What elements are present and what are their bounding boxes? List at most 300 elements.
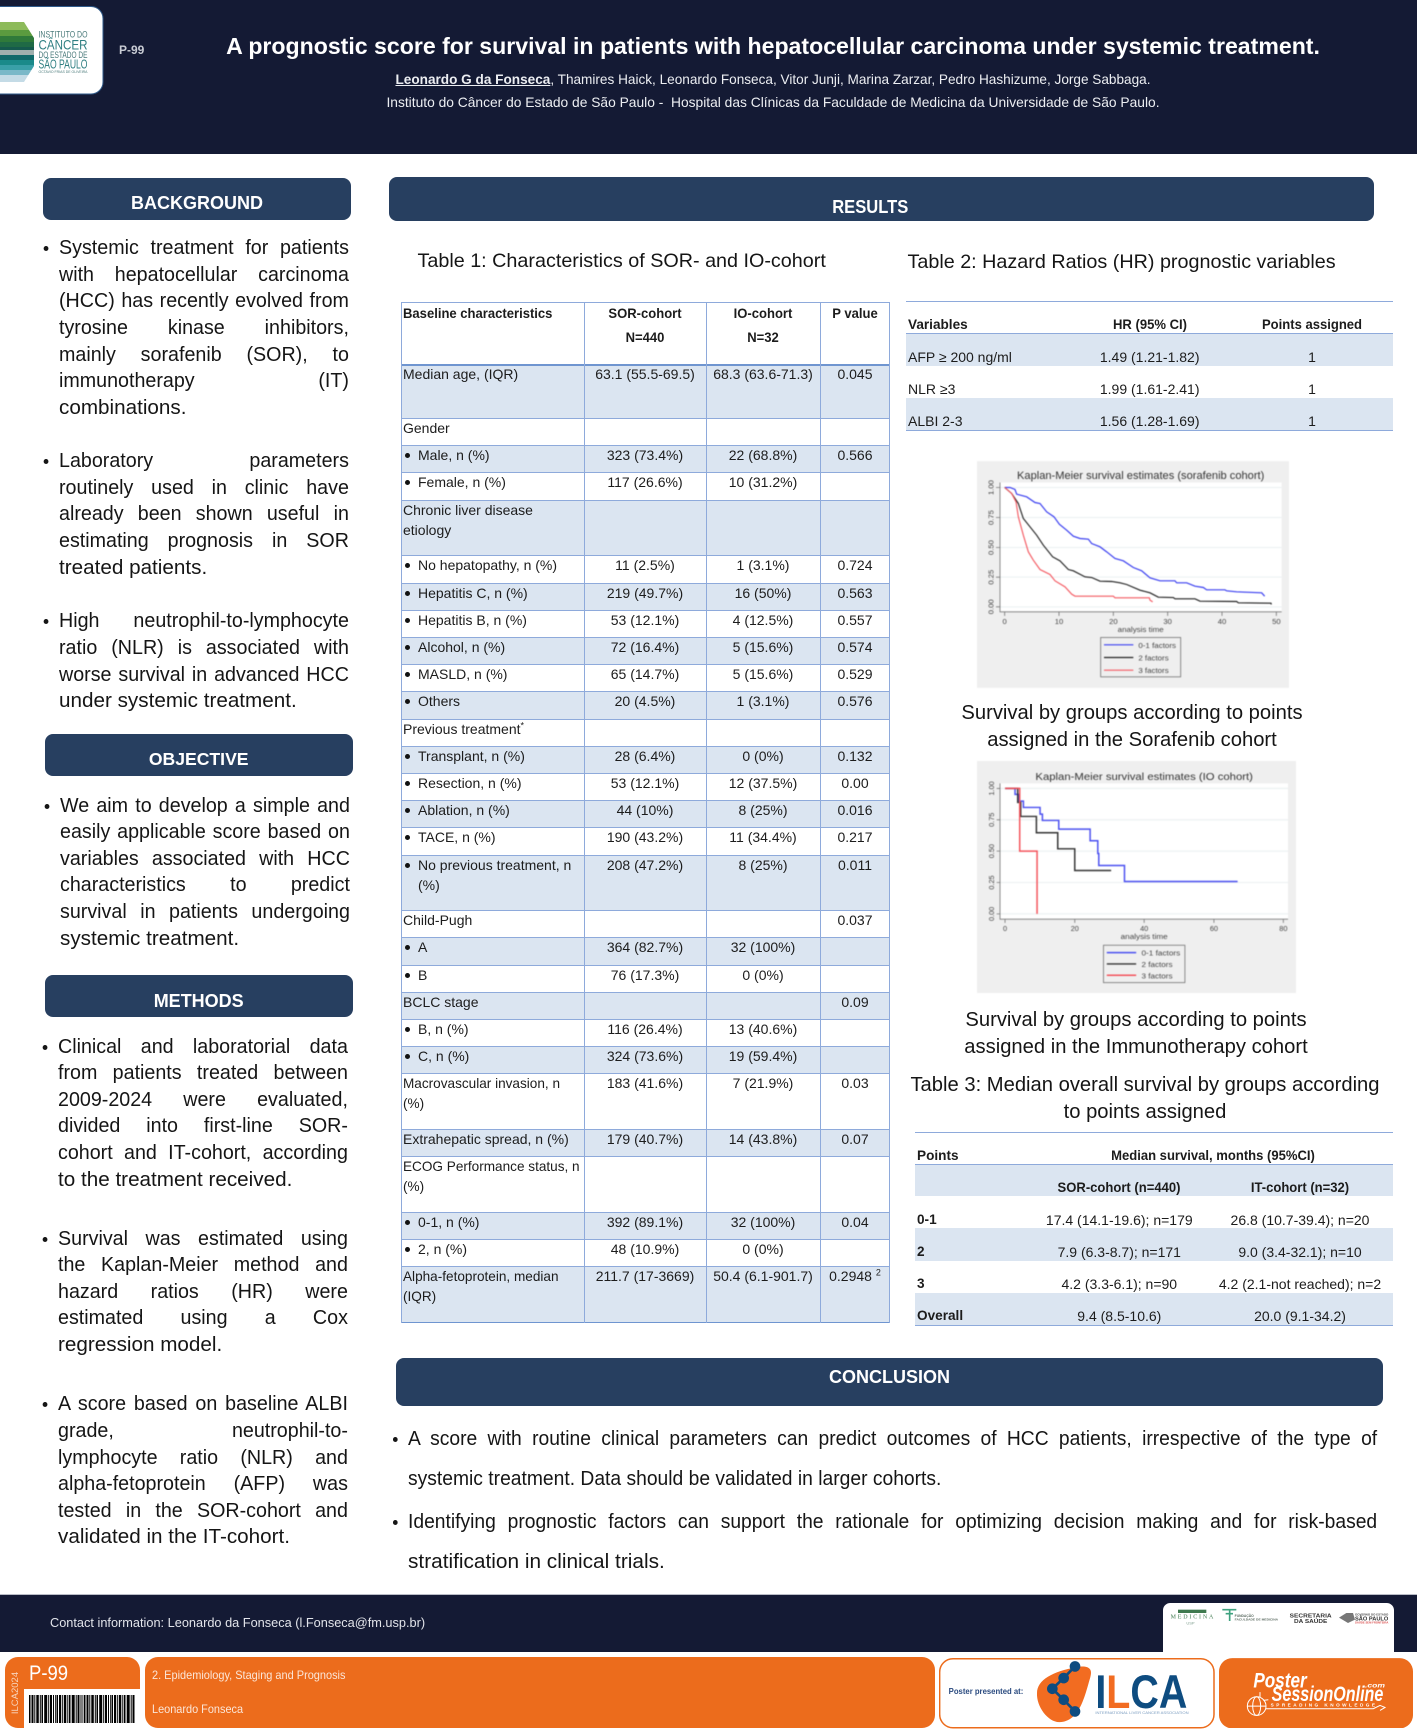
row: 3 points: 3 <box>917 1276 925 1290</box>
presenter: Leonardo Fonseca <box>152 1702 243 1716</box>
row: 2 points: 2 <box>917 1244 925 1258</box>
row: macrovascular invasion: (%) <box>403 1095 424 1111</box>
logo: PosterSessionOnline: SPREADING KNOWLEDGE <box>1271 1702 1375 1707</box>
row: child-pugh <box>401 910 890 937</box>
text: objective bullet: variables associated with HCC <box>60 847 350 870</box>
text: methods bullet 3: alpha-fetoprotein (AFP) was <box>58 1472 348 1495</box>
text: background bullet 1: immunotherapy (IT) <box>59 369 349 392</box>
row: BCLC stage: BCLC stage <box>403 994 478 1010</box>
row: hepatitis C <box>401 583 890 610</box>
caption: sorafenib survival: Survival by groups according to points <box>961 702 1303 724</box>
text: objective bullet: We aim to develop a simple and <box>60 794 350 817</box>
logo: PosterSessionOnline: .com <box>1365 1683 1386 1689</box>
table 3 title: to points assigned <box>1064 1101 1226 1123</box>
text: background bullet 3: High neutrophil-to-lymphocyte <box>59 609 349 632</box>
text: methods bullet 1: divided into first-line SOR- <box>58 1114 348 1137</box>
text: methods bullet 1: cohort and IT-cohort, according <box>58 1141 348 1164</box>
row: ECOG 2: 0 (0%) <box>742 1241 784 1257</box>
row: 0-1 points <box>917 1212 1369 1228</box>
row: MASLD: 65 (14.7%) <box>611 666 679 682</box>
table 1 header row: Baseline characteristics <box>403 306 552 321</box>
partner logos: SAÚDE SEM FRONTEIRA <box>1355 1620 1388 1625</box>
row: ALBI: ALBI 2-3 <box>908 413 962 429</box>
table 1 header row: IO-cohort <box>734 306 792 321</box>
text: objective bullet <box>60 793 350 952</box>
table 1 title: Table 1: Characteristics of SOR- and IO-cohort <box>418 250 826 272</box>
table 2 header <box>908 317 1362 332</box>
text: methods bullet 2 <box>58 1226 348 1359</box>
row: ablation: 8 (25%) <box>738 802 788 818</box>
chart: Kaplan-Meier sorafenib cohort: 30 <box>1163 617 1172 626</box>
table 3 header <box>917 1148 1315 1163</box>
partner logos <box>1163 1603 1394 1652</box>
category and presenter strip <box>145 1657 935 1728</box>
logo: ILCA poster presented at <box>939 1658 1215 1728</box>
text: methods bullet 3: tested in the SOR-cohort and <box>58 1499 348 1522</box>
row: alcohol: 5 (15.6%) <box>733 639 793 655</box>
heading: methods: METHODS <box>154 991 244 1011</box>
logo: ILCA poster presented at: ILCA <box>1095 1666 1187 1719</box>
row: male: 0.566 <box>837 447 873 463</box>
text: methods bullet 1: Clinical and laboratorial data <box>58 1035 348 1058</box>
row: no previous treatment: No previous treatment, n <box>418 857 571 873</box>
row: ECOG 2: 48 (10.9%) <box>611 1241 679 1257</box>
row: ECOG 0-1: 0-1, n (%) <box>418 1214 479 1230</box>
table 3 title: Table 3: Median overall survival by groups according <box>910 1074 1380 1096</box>
row: resection: 12 (37.5%) <box>729 775 797 791</box>
row: hepatitis B: 4 (12.5%) <box>733 612 793 628</box>
row: hepatitis C: 16 (50%) <box>735 585 791 601</box>
row: NLR: 1.99 (1.61-2.41) <box>1100 381 1200 397</box>
row: MASLD: MASLD, n (%) <box>418 666 507 682</box>
chart: Kaplan-Meier IO cohort: 80 <box>1279 924 1287 933</box>
table 2: hazard ratios <box>906 301 1393 431</box>
chart: Kaplan-Meier sorafenib cohort: 40 <box>1218 617 1226 626</box>
text: background bullet 1: with hepatocellular carcinoma <box>59 263 349 286</box>
row: NLR: NLR ≥3 <box>908 381 955 397</box>
chart: Kaplan-Meier IO cohort: 20 <box>1071 924 1079 933</box>
row: hepatitis B: Hepatitis B, n (%) <box>418 612 527 628</box>
row: ECOG performance status: (%) <box>403 1178 424 1194</box>
table 3: median overall survival <box>915 1132 1393 1326</box>
text: background bullet 2: estimating prognosis in SOR <box>59 529 349 552</box>
row: ECOG 2: 2, n (%) <box>418 1241 467 1257</box>
table 3 header: Median survival, months (95%CI) <box>1111 1148 1315 1162</box>
row: alpha-fetoprotein: Alpha-fetoprotein, median <box>403 1268 559 1284</box>
row: 0-1 points: 0-1 <box>917 1212 937 1226</box>
row: alpha-fetoprotein: 0.2948 2 <box>829 1267 881 1284</box>
text: background bullet 1: tyrosine kinase inhibitors, <box>59 316 349 339</box>
poster code: P-99 <box>119 43 144 57</box>
row: AFP: 1.49 (1.21-1.82) <box>1100 349 1200 365</box>
chart: Kaplan-Meier IO cohort <box>977 761 1296 993</box>
row: 2 points: 7.9 (6.3-8.7); n=171 <box>1058 1244 1181 1260</box>
table 3 header: Points <box>917 1148 959 1162</box>
row: others: 1 (3.1%) <box>737 693 789 709</box>
table 1: baseline characteristics <box>401 302 890 1323</box>
chart: Kaplan-Meier sorafenib cohort: 1.00 <box>986 480 995 495</box>
row: female: 117 (26.6%) <box>607 474 683 490</box>
row: transplant: 0.132 <box>837 748 873 764</box>
row: ablation: Ablation, n (%) <box>418 802 510 818</box>
row: AFP <box>908 349 1316 365</box>
row: BCLC B: 116 (26.4%) <box>607 1021 683 1037</box>
row: transplant: 28 (6.4%) <box>615 748 675 764</box>
row: alcohol: Alcohol, n (%) <box>418 639 505 655</box>
row: others: 0.576 <box>837 693 873 709</box>
chart: Kaplan-Meier sorafenib cohort: 0.75 <box>986 510 995 525</box>
logo: PosterSessionOnline <box>1219 1658 1413 1728</box>
row: AFP: 1 <box>1308 349 1316 365</box>
row: macrovascular invasion: 183 (41.6%) <box>607 1075 683 1091</box>
row: child-pugh B: 0 (0%) <box>742 967 784 983</box>
row: female: Female, n (%) <box>418 474 506 490</box>
heading: background <box>43 178 351 220</box>
row: ECOG performance status: ECOG Performance status, n <box>403 1158 580 1174</box>
row: alpha-fetoprotein: (IQR) <box>403 1288 436 1304</box>
row: others <box>401 691 890 719</box>
row: ablation: 0.016 <box>837 802 873 818</box>
chart: Kaplan-Meier IO cohort: 2 factors <box>1142 960 1173 969</box>
text: methods bullet 2: estimated using a Cox <box>58 1306 348 1329</box>
authors: Leonardo G da Fonseca, Thamires Haick, Leonardo Fonseca, Vitor Junji, Marina Zarzar, Pedro Hashizume, Jorge Sabbaga. <box>395 72 1151 87</box>
row: BCLC C: 19 (59.4%) <box>729 1048 797 1064</box>
row: no hepatopathy: 1 (3.1%) <box>737 557 789 573</box>
chart: Kaplan-Meier sorafenib cohort: Kaplan-Meier survival estimates (sorafenib cohort) <box>1017 470 1264 482</box>
row: no previous treatment: 0.011 <box>838 857 872 873</box>
text: background bullet 1 <box>59 235 349 421</box>
text: methods bullet 3: A score based on baseline ALBI <box>58 1392 348 1415</box>
row: child-pugh B: 76 (17.3%) <box>611 967 679 983</box>
row: ECOG 0-1 <box>401 1212 890 1239</box>
row: child-pugh: 0.037 <box>837 912 873 928</box>
row: no hepatopathy: 0.724 <box>837 557 873 573</box>
heading: objective: OBJECTIVE <box>149 749 249 769</box>
row: TACE: 11 (34.4%) <box>729 829 797 845</box>
table 1 header row: N=440 <box>626 330 664 345</box>
text: background bullet 2: treated patients. <box>59 556 207 579</box>
row: no previous treatment <box>401 855 890 910</box>
chart: Kaplan-Meier sorafenib cohort: analysis time <box>1118 625 1164 634</box>
row: overall: 9.4 (8.5-10.6) <box>1077 1308 1161 1324</box>
caption: sorafenib survival <box>961 702 1303 751</box>
affiliation: Instituto do Câncer do Estado de São Paulo - Hospital das Clínicas da Faculdade de Medicina da Universidade de São Paulo. <box>386 95 1160 110</box>
row: alpha-fetoprotein: 211.7 (17-3669) <box>596 1268 694 1284</box>
row: others: 20 (4.5%) <box>615 693 675 709</box>
text: background bullet 2 <box>59 448 349 581</box>
row: median age: 63.1 (55.5-69.5) <box>595 366 695 382</box>
row: MASLD: 5 (15.6%) <box>733 666 793 682</box>
chart: Kaplan-Meier sorafenib cohort: 2 factors <box>1138 654 1169 662</box>
row: ablation <box>401 800 890 827</box>
row: overall: 20.0 (9.1-34.2) <box>1254 1308 1346 1324</box>
table 1 header row: P value <box>832 306 878 321</box>
chart: Kaplan-Meier IO cohort: analysis time <box>1121 932 1168 941</box>
row: 3 points: 4.2 (3.3-6.1); n=90 <box>1062 1276 1177 1292</box>
chart: Kaplan-Meier sorafenib cohort: 3 factors <box>1138 666 1169 675</box>
row: ECOG performance status <box>401 1156 890 1212</box>
row: resection: Resection, n (%) <box>418 775 521 791</box>
partner logos: MEDICINA <box>1171 1615 1214 1621</box>
row: hepatitis B <box>401 610 890 637</box>
partner logos: GOVERNO DO ESTADO <box>1355 1613 1388 1617</box>
row: median age: Median age, (IQR) <box>403 366 518 382</box>
text: methods bullet 1: 2009-2024 were evaluated, <box>58 1088 348 1111</box>
chart: Kaplan-Meier IO cohort: 1.00 <box>987 781 996 796</box>
text: background bullet 2: Laboratory parameters <box>59 449 349 472</box>
row: chronic liver disease etiology: etiology <box>403 522 451 538</box>
row: NLR <box>908 381 1316 397</box>
row: female: 10 (31.2%) <box>729 474 797 490</box>
vertical conference label: ILCA2024 <box>10 1672 20 1714</box>
row: hepatitis B: 53 (12.1%) <box>611 612 679 628</box>
chart: Kaplan-Meier IO cohort: 0.00 <box>987 907 996 921</box>
caption: sorafenib survival: assigned in the Sorafenib cohort <box>987 729 1277 751</box>
text: methods bullet 1: from patients treated between <box>58 1061 348 1084</box>
text: conclusion bullet 2: Identifying prognostic factors can support the rationale for optimizing decision making and for risk-based <box>408 1510 1377 1533</box>
chart: Kaplan-Meier sorafenib cohort <box>977 461 1289 688</box>
row: resection: 0.00 <box>841 775 869 791</box>
row: macrovascular invasion: 7 (21.9%) <box>733 1075 793 1091</box>
row: macrovascular invasion: 0.03 <box>841 1075 869 1091</box>
chart: Kaplan-Meier sorafenib cohort: 0.25 <box>986 570 995 585</box>
chart: Kaplan-Meier sorafenib cohort: 0-1 factors <box>1138 641 1176 650</box>
row: median age <box>401 364 890 418</box>
row: child-pugh: Child-Pugh <box>403 912 472 928</box>
heading: conclusion <box>396 1358 1383 1406</box>
row: macrovascular invasion: Macrovascular invasion, n <box>403 1075 560 1091</box>
row: hepatitis C: Hepatitis C, n (%) <box>418 585 528 601</box>
text: objective bullet: systemic treatment. <box>60 927 239 950</box>
logo: Instituto do Cancer: OCTAVIO FRIAS DE OLIVEIRA <box>38 70 88 74</box>
header banner <box>0 0 1417 154</box>
row: ECOG 0-1: 392 (89.1%) <box>607 1214 683 1230</box>
row: BCLC C: 324 (73.6%) <box>607 1048 683 1064</box>
partner logos: USP <box>1186 1621 1195 1626</box>
text: methods bullet 2: regression model. <box>58 1333 223 1356</box>
row: no previous treatment: 208 (47.2%) <box>607 857 683 873</box>
text: methods bullet 3: lymphocyte ratio (NLR) and <box>58 1446 348 1469</box>
row: BCLC C <box>401 1046 890 1073</box>
chart: Kaplan-Meier IO cohort: 0-1 factors <box>1142 949 1181 958</box>
row: 2 points: 9.0 (3.4-32.1); n=10 <box>1238 1244 1362 1260</box>
table 3 title <box>910 1074 1380 1123</box>
row: male: 22 (68.8%) <box>729 447 797 463</box>
row: extrahepatic spread: 0.07 <box>841 1131 869 1147</box>
row: child-pugh B <box>401 965 890 992</box>
row: overall <box>917 1308 1346 1324</box>
row: ECOG 2 <box>401 1239 890 1266</box>
row: TACE: 0.217 <box>837 829 873 845</box>
text: background bullet 3: worse survival in advanced HCC <box>59 663 349 686</box>
row: NLR: 1 <box>1308 381 1316 397</box>
table 2 title: Table 2: Hazard Ratios (HR) prognostic variables <box>908 251 1336 273</box>
text: objective bullet: characteristics to predict <box>60 873 350 896</box>
row: others: Others <box>418 693 460 709</box>
row: no hepatopathy: 11 (2.5%) <box>615 557 675 573</box>
row: BCLC C: C, n (%) <box>418 1048 469 1064</box>
row: 3 points <box>917 1276 1381 1292</box>
row: male: 323 (73.4%) <box>607 447 683 463</box>
row: resection <box>401 773 890 800</box>
text: methods bullet 1: to the treatment received. <box>58 1168 293 1191</box>
chart: Kaplan-Meier sorafenib cohort: 20 <box>1109 617 1118 626</box>
row: chronic liver disease etiology: Chronic liver disease <box>403 502 533 518</box>
row: previous treatment: Previous treatment* <box>403 720 524 737</box>
caption: immunotherapy survival: Survival by groups according to points <box>965 1009 1307 1031</box>
table 1 header row: SOR-cohort <box>608 306 682 321</box>
row: alcohol: 0.574 <box>837 639 873 655</box>
text: methods bullet 2: hazard ratios (HR) were <box>58 1280 348 1303</box>
row: extrahepatic spread <box>401 1129 890 1156</box>
row: previous treatment <box>401 719 890 746</box>
chart: Kaplan-Meier sorafenib cohort: 0.50 <box>986 540 995 555</box>
row: 2 points <box>917 1244 1362 1260</box>
row: transplant: Transplant, n (%) <box>418 748 525 764</box>
logo: ILCA poster presented at: Poster presented at: <box>949 1687 1023 1696</box>
row: median age: 68.3 (63.6-71.3) <box>713 366 813 382</box>
row: child-pugh A <box>401 937 890 965</box>
row: ablation: 44 (10%) <box>617 802 673 818</box>
row: ALBI: 1 <box>1308 413 1316 429</box>
row: overall: Overall <box>917 1308 963 1323</box>
text: background bullet 2: already been shown useful in <box>59 502 349 525</box>
category: 2. Epidemiology, Staging and Prognosis <box>152 1668 345 1682</box>
text: background bullet 1: mainly sorafenib (SOR), to <box>59 343 349 366</box>
chart: Kaplan-Meier sorafenib cohort: 0 <box>1003 617 1007 626</box>
row: alcohol <box>401 637 890 664</box>
text: methods bullet 3: grade, neutrophil-to- <box>58 1419 348 1442</box>
text: conclusion bullet 1: A score with routine clinical parameters can predict outcomes of HCC patients, irrespective of the type of <box>408 1427 1377 1450</box>
row: 3 points: 4.2 (2.1-not reached); n=2 <box>1219 1276 1381 1292</box>
text: background bullet 3: ratio (NLR) is associated with <box>59 636 349 659</box>
row: ECOG 0-1: 0.04 <box>841 1214 869 1230</box>
row: TACE: 190 (43.2%) <box>607 829 683 845</box>
row: MASLD <box>401 664 890 691</box>
row: transplant <box>401 746 890 773</box>
text: conclusion bullet 2: stratification in clinical trials. <box>408 1550 665 1573</box>
heading: conclusion: CONCLUSION <box>829 1367 950 1387</box>
row: BCLC stage <box>401 992 890 1019</box>
chart: Kaplan-Meier IO cohort: Kaplan-Meier survival estimates (IO cohort) <box>1035 772 1253 783</box>
logo: Instituto do Cancer: DO ESTADO DE <box>38 50 88 60</box>
row: hepatitis B: 0.557 <box>837 612 873 628</box>
heading: results: RESULTS <box>832 196 908 217</box>
row: extrahepatic spread: Extrahepatic spread, n (%) <box>403 1131 569 1147</box>
poster id badge <box>4 1657 140 1728</box>
text: methods bullet 1 <box>58 1034 348 1193</box>
barcode <box>24 1689 140 1728</box>
row: no hepatopathy <box>401 555 890 583</box>
row: chronic liver disease etiology <box>401 500 890 555</box>
row: TACE: TACE, n (%) <box>418 829 496 845</box>
row: child-pugh A: 364 (82.7%) <box>607 939 683 955</box>
footer contact bar <box>0 1594 1417 1652</box>
row: child-pugh A: 32 (100%) <box>731 939 795 955</box>
row: MASLD: 0.529 <box>837 666 873 682</box>
chart: Kaplan-Meier IO cohort: 60 <box>1210 924 1218 933</box>
table 3 sub-header: IT-cohort (n=32) <box>1251 1180 1349 1194</box>
text: background bullet 2: routinely used in clinic have <box>59 476 349 499</box>
chart: Kaplan-Meier sorafenib cohort: 10 <box>1055 617 1063 626</box>
chart: Kaplan-Meier IO cohort: 0.75 <box>987 813 996 827</box>
text: background bullet 1: Systemic treatment for patients <box>59 236 349 259</box>
text: conclusion bullet 1 <box>408 1419 1377 1499</box>
partner logos: DA SAÚDE <box>1294 1618 1328 1625</box>
table 2 header: HR (95% CI) <box>1113 317 1187 332</box>
text: methods bullet 3 <box>58 1391 348 1551</box>
row: hepatitis C: 0.563 <box>837 585 873 601</box>
text: conclusion bullet 2 <box>408 1502 1377 1581</box>
table 3 sub-header: SOR-cohort (n=440) <box>1058 1180 1181 1194</box>
text: methods bullet 2: the Kaplan-Meier method and <box>58 1253 348 1276</box>
row: AFP: AFP ≥ 200 ng/ml <box>908 349 1012 365</box>
row: macrovascular invasion <box>401 1073 890 1129</box>
row: transplant: 0 (0%) <box>742 748 784 764</box>
table 2 header: Points assigned <box>1262 317 1362 332</box>
caption: immunotherapy survival <box>964 1009 1308 1058</box>
logo: Instituto do Cancer <box>0 6 104 94</box>
row: TACE <box>401 827 890 855</box>
row: child-pugh B: B <box>418 967 427 983</box>
partner logos: SECRETARIA <box>1290 1613 1332 1619</box>
row: extrahepatic spread: 14 (43.8%) <box>729 1131 797 1147</box>
row: no previous treatment: (%) <box>418 877 440 893</box>
heading: results <box>389 177 1374 221</box>
text: conclusion bullet 1: systemic treatment. Data should be validated in larger cohorts. <box>408 1467 941 1490</box>
text: objective bullet: easily applicable score based on <box>60 820 350 843</box>
poster number: P-99 <box>28 1662 68 1685</box>
logo: Instituto do Cancer: INSTITUTO DO <box>38 30 88 40</box>
text: background bullet 1: (HCC) has recently evolved from <box>59 289 349 312</box>
row: male: Male, n (%) <box>418 447 490 463</box>
text: objective bullet: survival in patients undergoing <box>60 900 350 923</box>
row: hepatitis C: 219 (49.7%) <box>607 585 683 601</box>
partner logos: FACULDADE DE MEDICINA <box>1235 1617 1279 1621</box>
chart: Kaplan-Meier IO cohort: 0 <box>1003 924 1007 933</box>
row: no hepatopathy: No hepatopathy, n (%) <box>418 557 557 573</box>
text: background bullet 1: combinations. <box>59 396 186 419</box>
contact information: Contact information: Leonardo da Fonseca (l.Fonseca@fm.usp.br) <box>50 1615 425 1630</box>
chart: Kaplan-Meier IO cohort: 3 factors <box>1142 971 1173 980</box>
caption: immunotherapy survival: assigned in the Immunotherapy cohort <box>964 1036 1308 1058</box>
table 1 header row <box>401 302 890 364</box>
row: ECOG 0-1: 32 (100%) <box>731 1214 795 1230</box>
row: male <box>401 445 890 472</box>
table 3 sub-header <box>1058 1180 1349 1195</box>
row: resection: 53 (12.1%) <box>611 775 679 791</box>
row: BCLC stage: 0.09 <box>841 994 869 1010</box>
row: BCLC B <box>401 1019 890 1046</box>
table 2 header: Variables <box>908 317 968 332</box>
row: no previous treatment: 8 (25%) <box>738 857 788 873</box>
row: 0-1 points: 17.4 (14.1-19.6); n=179 <box>1046 1212 1193 1228</box>
chart: Kaplan-Meier sorafenib cohort: 50 <box>1272 617 1281 626</box>
row: gender: Gender <box>403 420 450 436</box>
row: female <box>401 472 890 500</box>
heading: methods <box>45 975 353 1017</box>
text: methods bullet 3: validated in the IT-cohort. <box>58 1525 290 1548</box>
row: BCLC B: B, n (%) <box>418 1021 469 1037</box>
row: alcohol: 72 (16.4%) <box>611 639 679 655</box>
row: ALBI: 1.56 (1.28-1.69) <box>1100 413 1200 429</box>
heading: background: BACKGROUND <box>131 193 263 213</box>
row: median age: 0.045 <box>837 366 873 382</box>
row: BCLC B: 13 (40.6%) <box>729 1021 797 1037</box>
logo: ILCA poster presented at: INTERNATIONAL LIVER CANCER ASSOCIATION <box>1095 1711 1189 1715</box>
row: gender <box>401 418 890 445</box>
chart: Kaplan-Meier IO cohort: 0.50 <box>987 844 996 858</box>
